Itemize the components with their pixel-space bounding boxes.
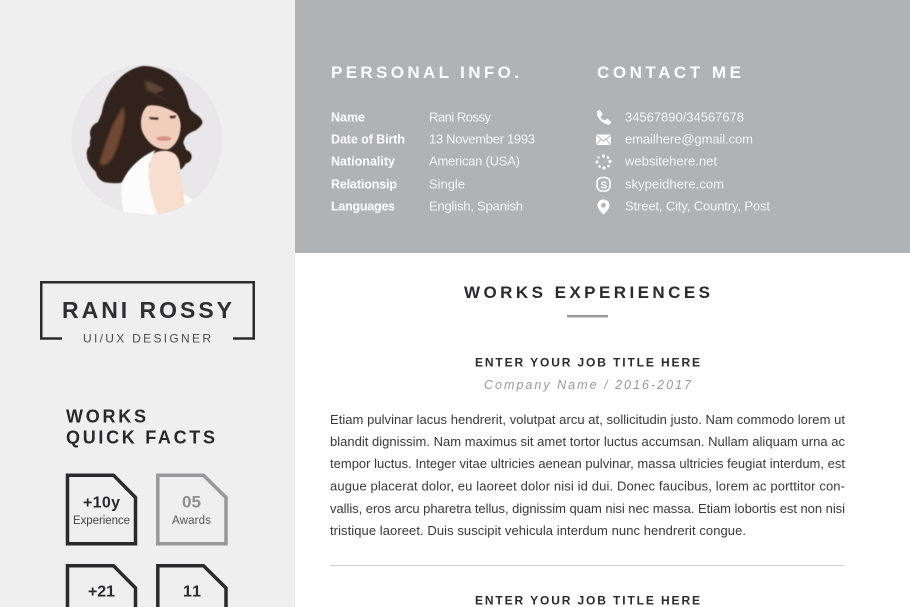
- heading: works experiences: WORKS EXPERIENCES: [464, 283, 710, 302]
- icon: website dots: [596, 154, 612, 170]
- stat card: third: [68, 566, 136, 607]
- contact details: websitehere.net: [624, 154, 717, 168]
- personal info values: 13 November 1993: [429, 132, 535, 146]
- personal info labels: Name: [331, 110, 365, 124]
- heading: contact me: CONTACT ME: [597, 63, 741, 82]
- personal info labels: Date of Birth: [331, 132, 405, 146]
- heading: works quick facts: WORKS: [66, 406, 146, 426]
- personal info labels: [331, 110, 405, 214]
- portrait photo: [86, 65, 204, 215]
- job description: Etiam pulvinar lacus hendrerit, volutpat arcu at, sollicitudin justo. Nam commodo lorem ut: [330, 412, 845, 427]
- icon: location pin: [598, 200, 610, 214]
- stat card: experience: Experience: [73, 515, 130, 527]
- contact details: 34567890/34567678: [625, 110, 744, 124]
- icon: phone: [597, 110, 611, 125]
- stat card: awards: Awards: [172, 515, 211, 527]
- heading: works quick facts: QUICK FACTS: [66, 428, 215, 448]
- icon: skype: S: [600, 180, 608, 192]
- personal info labels: Languages: [331, 200, 395, 214]
- icon: envelope: [596, 134, 611, 145]
- job title: ENTER YOUR JOB TITLE HERE: [475, 356, 700, 370]
- job role: UI/UX DESIGNER: [83, 332, 211, 346]
- stat card: experience: [68, 475, 136, 544]
- personal info values: Rani Rossy: [429, 110, 492, 124]
- contact details: emailhere@gmail.com: [625, 132, 753, 146]
- personal info labels: Relationsip: [331, 178, 397, 192]
- heading: personal info: PERSONAL INFO.: [331, 63, 519, 82]
- contact details: Street, City, Country, Post: [625, 198, 770, 214]
- contact details: skypeidhere.com: [625, 176, 724, 192]
- personal info labels: Nationality: [331, 154, 395, 168]
- panel: main content: [295, 253, 910, 607]
- name box: [41, 282, 254, 338]
- stat card: third: +21: [88, 584, 115, 600]
- job description: augue placerat dolor, eu laoreet dolor nisi id dui. Donec faucibus, lorem ac porttitor con-: [330, 478, 845, 494]
- job description: [330, 412, 846, 538]
- job description: tempor luctus. Integer vitae ultricies aenean pulvinar, massa ultricies feugiat interdum, est: [330, 456, 845, 471]
- company and dates: Company Name / 2016-2017: [484, 378, 692, 392]
- job description: vallis, eros arcu pharetra tellus, dignissim quam nisi nec massa. Etiam lobortis est non nisi: [330, 501, 845, 516]
- panel: sidebar: [0, 0, 295, 607]
- icon: skype: [597, 178, 610, 192]
- job description: blandit dignissim. Nam maximus sit amet tortor luctus accumsan. Nullam aliquam urna ac: [330, 434, 846, 449]
- stat card: awards: 05: [182, 492, 201, 512]
- name: RANI ROSSY: [62, 297, 232, 323]
- personal info values: English, Spanish: [429, 198, 523, 214]
- stat card: fourth: 11: [183, 584, 201, 600]
- personal info values: American (USA): [429, 154, 520, 168]
- job description: tristique laoreet. Duis suscipit vehicula interdum nunc hendrerit congue.: [330, 523, 746, 538]
- contact details: [624, 110, 770, 214]
- stat card: awards: [158, 475, 226, 544]
- personal info values: Single: [429, 176, 465, 192]
- heading: works quick facts: [66, 406, 215, 448]
- stat card: experience: +10y: [83, 494, 120, 512]
- stat card: fourth: [158, 566, 226, 607]
- panel: personal info header: [295, 0, 910, 253]
- personal info values: [429, 110, 535, 214]
